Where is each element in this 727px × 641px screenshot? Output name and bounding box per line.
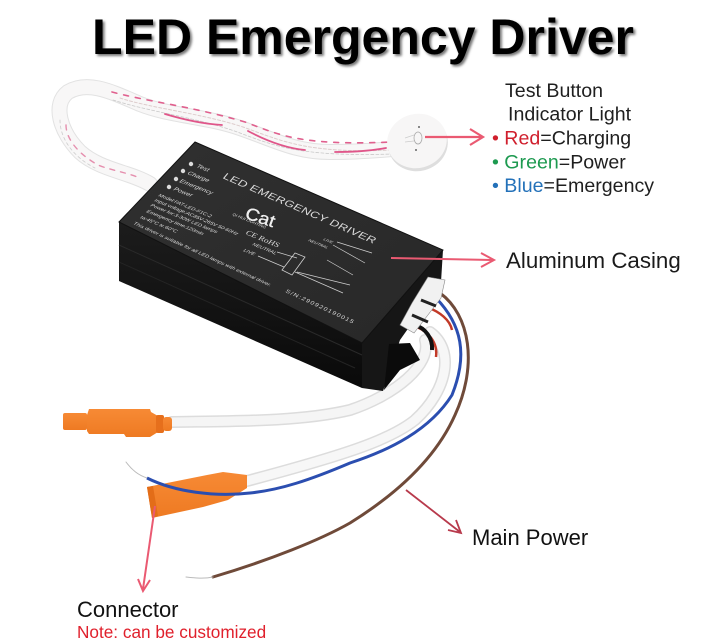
wires	[126, 293, 468, 578]
specification text: Emergency time:120min	[145, 209, 205, 237]
button labels: • Red=Charging	[492, 128, 631, 150]
wiring diagram: NEUTRAL	[251, 242, 278, 256]
ribbon cable	[59, 87, 392, 184]
blue wire over connector	[147, 298, 461, 494]
orange connector lower	[147, 472, 247, 518]
button labels: Indicator Light	[508, 104, 632, 126]
status LEDs	[167, 162, 215, 199]
case front face	[119, 222, 362, 388]
status LEDs: Test	[195, 163, 211, 173]
test button indicator disc	[381, 107, 454, 178]
button labels	[492, 80, 654, 197]
driver case	[119, 142, 452, 391]
orange connector upper	[63, 409, 172, 437]
white wire upper	[172, 340, 426, 422]
status LEDs: Charge	[186, 170, 211, 184]
callout: main power: Main Power	[472, 525, 588, 550]
button labels: • Green=Power	[492, 152, 626, 174]
wiring diagram: LIVE	[242, 248, 257, 257]
button labels: • Blue=Emergency	[492, 175, 654, 197]
wiring diagram: LIVE	[322, 237, 334, 245]
status LEDs: Power	[172, 186, 195, 199]
button labels: Test Button	[505, 80, 603, 102]
callout: aluminum casing: Aluminum Casing	[506, 248, 681, 273]
printed labels on case	[132, 162, 379, 325]
certification marks: CE RoHS	[244, 229, 282, 249]
brand logo: Cat	[243, 203, 278, 231]
serial number: S/N:290920190015	[284, 288, 356, 325]
terminal block	[400, 277, 445, 333]
callout: main power	[406, 490, 588, 550]
callout: connector: Connector	[77, 597, 179, 622]
white wire lower	[247, 332, 445, 481]
case top face	[119, 142, 443, 343]
callout: test button	[425, 80, 654, 197]
arrow to test button label	[425, 129, 483, 145]
specification text: ta:45°C tc:60°C	[139, 215, 179, 234]
title: LED Emergency Driver	[94, 11, 636, 67]
callout: connector	[77, 506, 266, 641]
wiring diagram: NEUTRAL	[307, 238, 329, 250]
specification text: Input voltage:AC85V-265V 50-60Hz	[153, 198, 240, 237]
cable clip	[384, 343, 420, 390]
specification text: Model:FAT-LED-F1C-2	[157, 193, 213, 219]
wire stubs	[417, 307, 452, 357]
specification text: This driver is suitable for all LED lamps with external driver.	[132, 221, 272, 288]
brown wire	[213, 293, 468, 577]
case side face	[362, 250, 443, 391]
specification text: Power for:3-30W LED lamps	[149, 203, 219, 235]
callout: aluminum casing	[391, 248, 681, 273]
product name: LED EMERGENCY DRIVER	[220, 172, 379, 246]
brand logo: QI HUI LIGHTING	[231, 212, 267, 229]
title: LED Emergency Driver	[92, 9, 634, 65]
wiring diagram	[242, 237, 372, 293]
status LEDs: Emergency	[178, 178, 215, 196]
